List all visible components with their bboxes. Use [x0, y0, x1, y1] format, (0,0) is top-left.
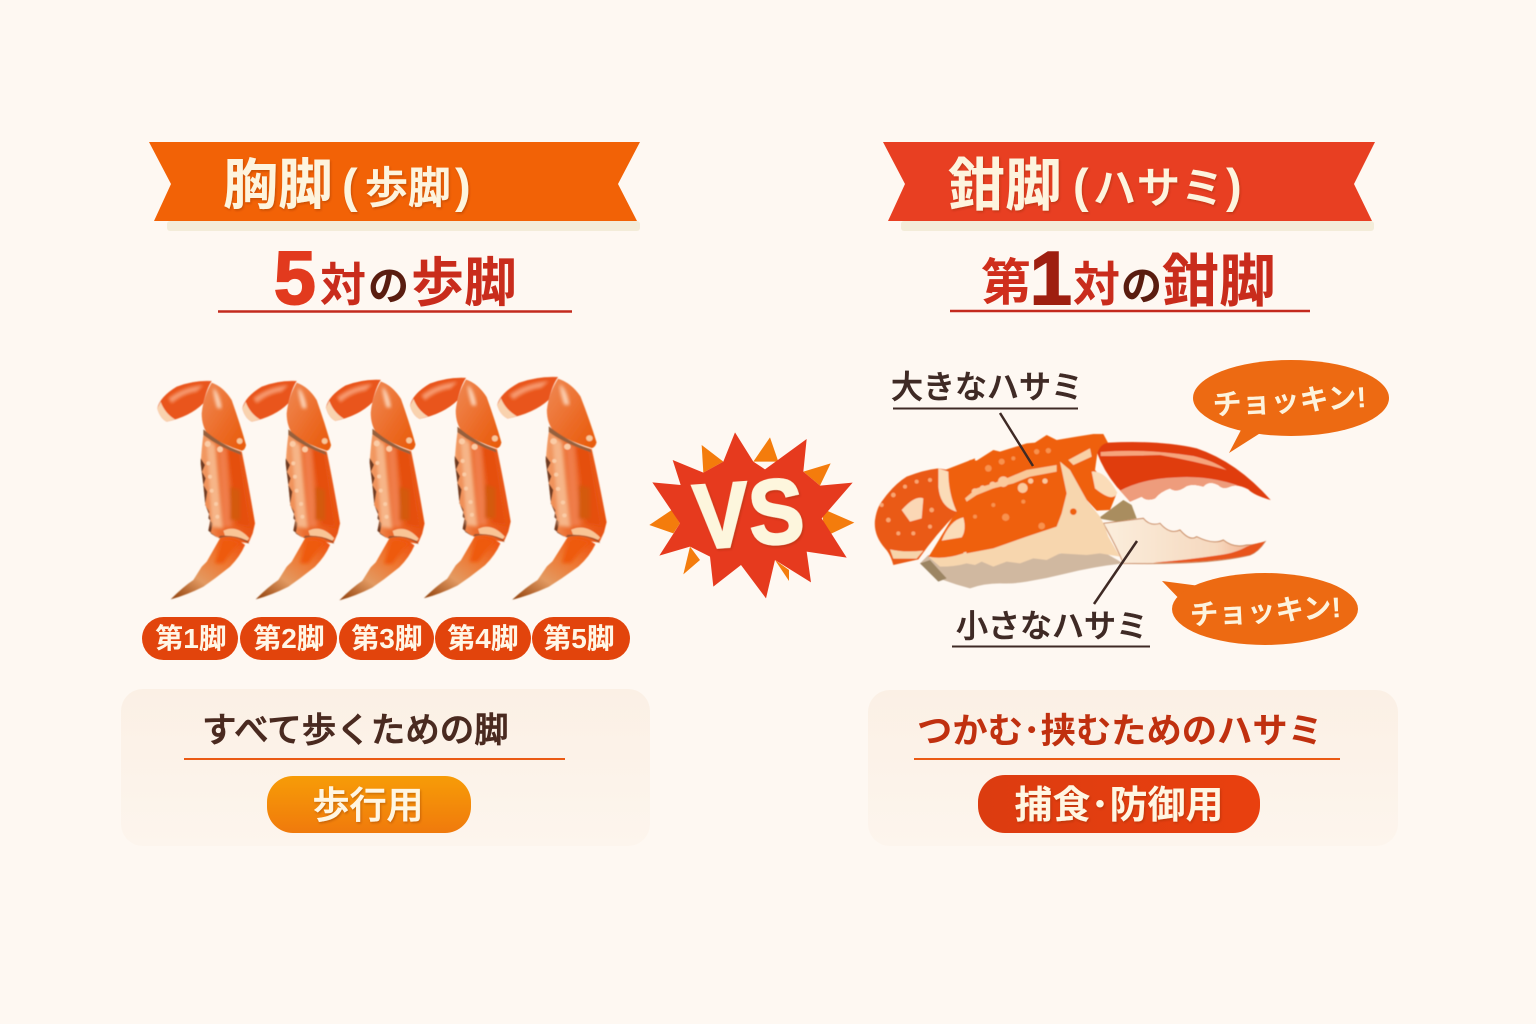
leg 4 [410, 378, 511, 598]
gray base [920, 550, 1123, 588]
palm backing [928, 458, 975, 557]
leg 2 [242, 381, 340, 599]
heading: first pair of claw legs: 対 [1073, 258, 1120, 311]
lower joint [928, 517, 964, 558]
ribbon: chest legs [149, 142, 640, 231]
heading: first pair of claw legs: 第 [981, 255, 1031, 311]
heading: five pairs of walking legs: 歩脚 [411, 254, 517, 313]
label: leg 4 [435, 617, 531, 660]
pill: walking use: 歩行用 [312, 785, 424, 826]
label: leg 2: 第2脚 [253, 623, 325, 654]
label: leg 4: 第4脚 [447, 623, 519, 654]
callout: large claw [891, 369, 1083, 466]
speech bubble: top [1193, 360, 1389, 453]
heading: five pairs of walking legs: の [368, 263, 409, 309]
leg labels [142, 617, 630, 660]
ribbon: claw legs [883, 142, 1375, 231]
label: leg 3: 第3脚 [351, 623, 423, 654]
illustration: crab claw [875, 434, 1271, 588]
speech bubble: top: チョッキン! [1212, 382, 1367, 422]
knuckle [1092, 472, 1117, 497]
leader line: large claw [1000, 413, 1033, 466]
label: leg 5: 第5脚 [543, 623, 615, 654]
leg 5 [497, 377, 607, 600]
ribbon title: claw legs [948, 154, 1242, 218]
pill: feeding and defense [978, 775, 1260, 833]
ribbon title: claw legs: ( [1073, 159, 1089, 212]
ribbon title: chest legs: ( [342, 159, 358, 212]
ribbon title: chest legs: 歩脚 [365, 165, 451, 213]
VS text: VS [690, 460, 807, 569]
speech bubble: bottom: チョッキン! [1189, 592, 1342, 632]
label: leg 2 [240, 617, 337, 660]
panel text: for grasping: つかむ･挟むためのハサミ [917, 712, 1323, 751]
heading: five pairs of walking legs [218, 236, 572, 320]
ribbon title: claw legs: ) [1226, 159, 1242, 212]
heading: five pairs of walking legs: 対 [320, 259, 366, 311]
pill: feeding and defense: 捕食･防御用 [1014, 785, 1224, 827]
lower finger [1103, 518, 1265, 564]
leg 3 [326, 380, 425, 600]
heading: first pair of claw legs [950, 236, 1310, 320]
ribbon title: chest legs [223, 154, 471, 216]
label: leg 5 [532, 617, 630, 660]
olive web [1098, 500, 1137, 522]
label: leg 3 [339, 617, 434, 660]
illustration: five walking legs [157, 377, 607, 600]
label: leg 1 [142, 617, 238, 660]
panel: claw purpose [868, 690, 1398, 846]
ribbon title: claw legs: 鉗脚 [948, 154, 1062, 218]
callout: small claw: 小さなハサミ [956, 608, 1148, 644]
ribbon title: chest legs: ) [455, 159, 471, 212]
upper finger [1097, 442, 1271, 502]
palm cream [928, 462, 1120, 567]
label: leg 1: 第1脚 [155, 623, 227, 654]
speech bubble: bottom [1162, 573, 1358, 645]
callout: large claw: 大きなハサミ [891, 369, 1083, 405]
heading: first pair of claw legs: 鉗脚 [1162, 250, 1276, 314]
pill: walking use [267, 776, 471, 833]
leader line: small claw [1094, 541, 1137, 604]
heading: first pair of claw legs: 1 [1030, 236, 1072, 320]
ribbon title: chest legs: 胸脚 [223, 154, 333, 216]
heading: first pair of claw legs: の [1121, 263, 1162, 309]
callout: small claw [952, 541, 1150, 646]
wrist [875, 468, 957, 565]
palm orange [950, 434, 1117, 553]
heading: five pairs of walking legs: 5 [274, 236, 316, 320]
panel: walking purpose [121, 689, 650, 846]
leg 1 [157, 381, 255, 599]
VS starburst [649, 432, 854, 598]
ribbon title: claw legs: ハサミ [1093, 165, 1225, 213]
panel text: all for walking: すべて歩くための脚 [202, 712, 509, 750]
